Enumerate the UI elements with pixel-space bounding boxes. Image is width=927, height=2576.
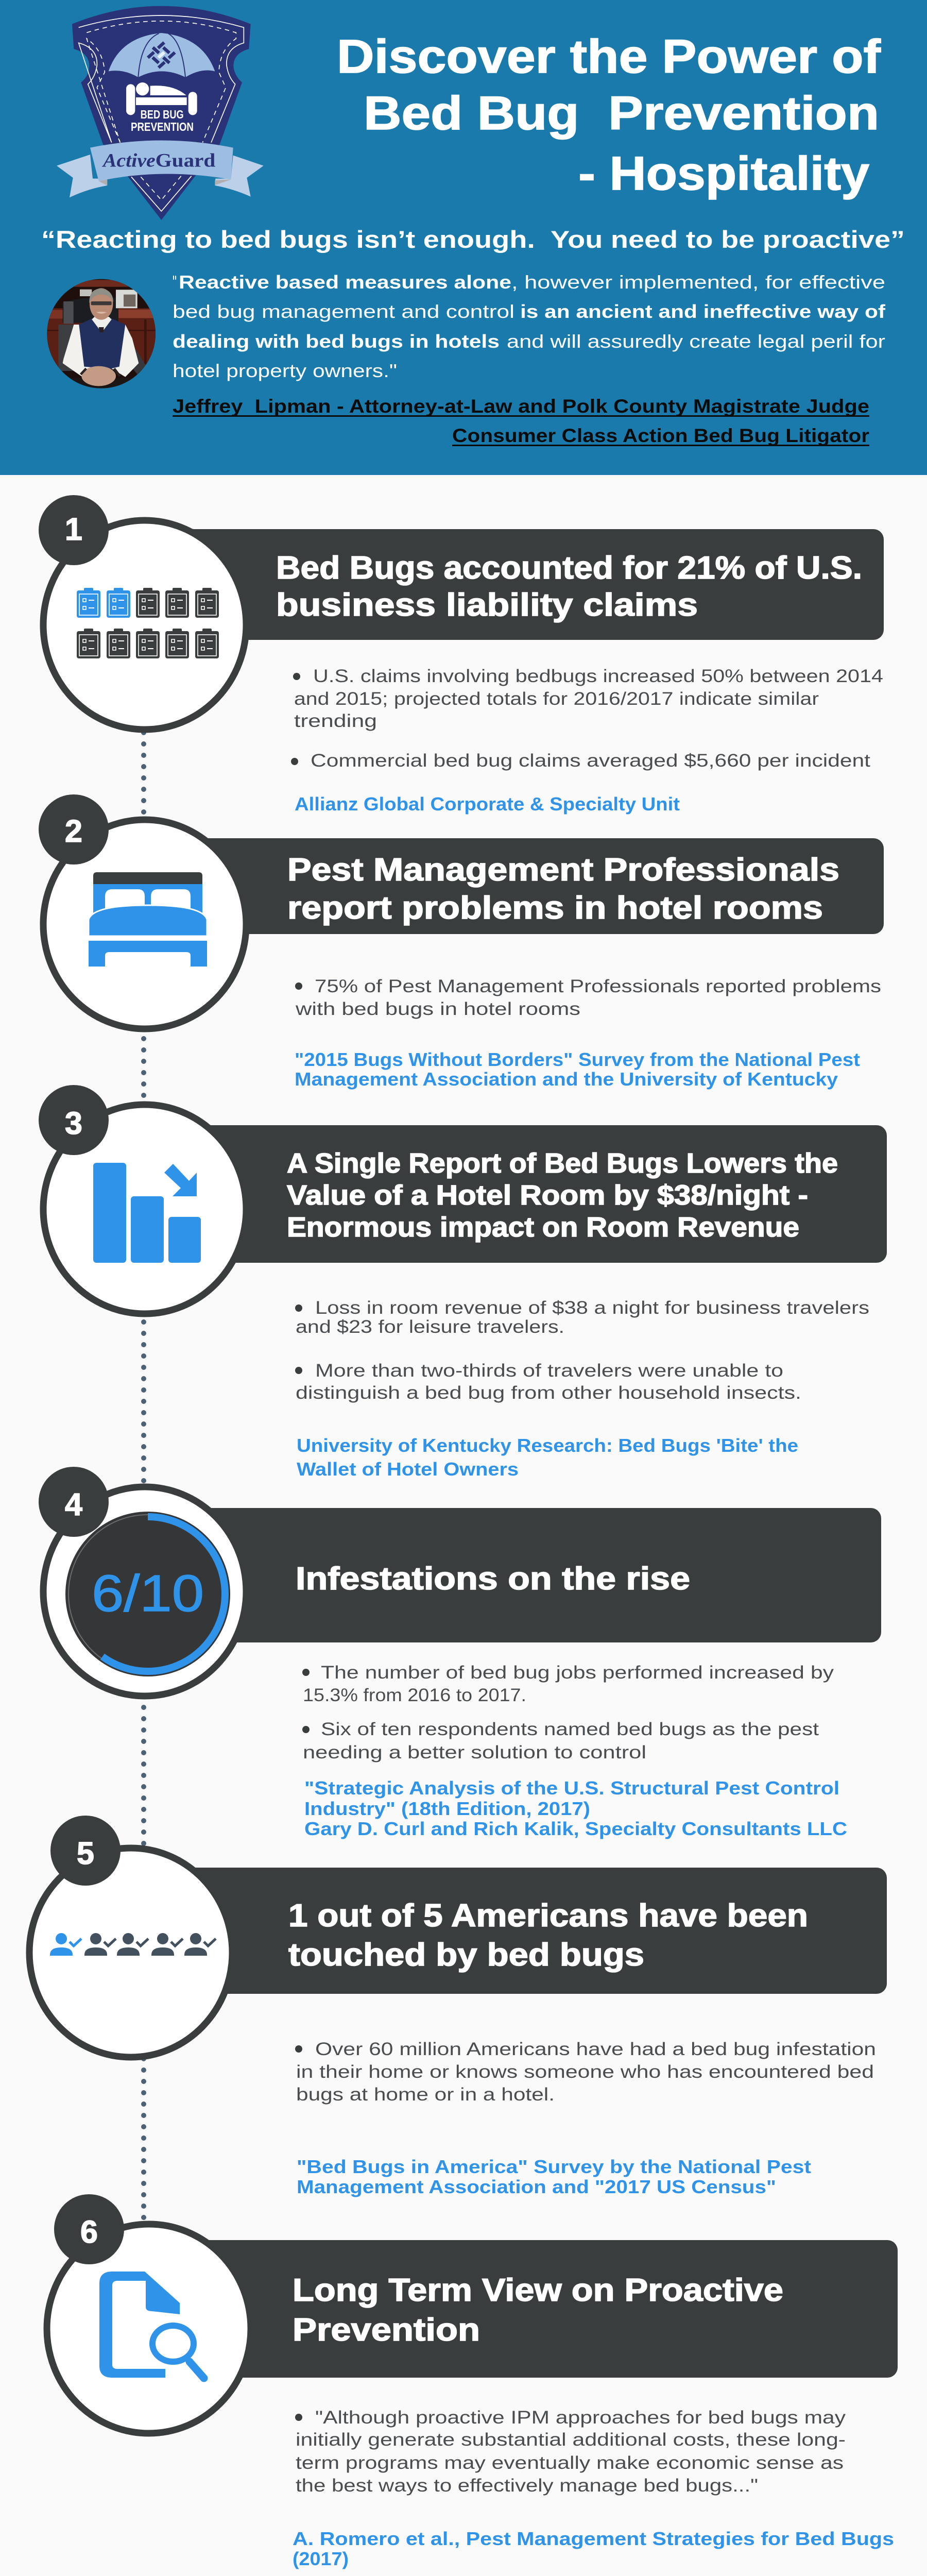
quote body: " — [173, 272, 177, 293]
bullets 1: trending — [294, 711, 377, 731]
attribution — [173, 396, 869, 446]
heading banner 2: Pest Management Professionals — [287, 852, 839, 888]
source 4: Gary D. Curl and Rich Kalik, Specialty Consultants LLC — [304, 1818, 847, 1839]
bullet 6: initially generate substantial additional costs, these long- — [296, 2430, 846, 2450]
heading banner 2: report problems in hotel rooms — [287, 890, 823, 926]
logo badge: ActiveGuard shield: PREVENTION — [131, 120, 194, 133]
photo: Jeffrey Lipman portrait — [45, 278, 158, 392]
bullets 4 — [302, 1663, 834, 1762]
source 5: "Bed Bugs in America" Survey by the National Pest — [297, 2156, 811, 2177]
heading banner 5 — [149, 1868, 887, 1994]
bullets 3: distinguish a bed bug from other household insects. — [296, 1383, 801, 1403]
pull quote: “Reacting to bed bugs isn’t enough. You need to be proactive” — [41, 226, 905, 253]
icon circle 2: bed — [43, 820, 246, 1029]
number badge 5: 5 — [77, 1836, 94, 1871]
heading banner 4: Infestations on the rise — [296, 1561, 690, 1597]
source 6 — [293, 2528, 894, 2569]
bullet 5: Over 60 million Americans have had a bed bug infestation — [315, 2039, 876, 2059]
quote body: and will assuredly create legal peril for — [507, 331, 885, 352]
heading banner 4 — [149, 1508, 881, 1642]
bullet 2 — [295, 976, 881, 1019]
icon circle 1: clipboards — [43, 520, 246, 730]
bullets 3 — [295, 1298, 869, 1403]
logo badge: ActiveGuard shield: Active — [102, 150, 156, 171]
bullet 6: the best ways to effectively manage bed bugs..." — [296, 2476, 758, 2496]
logo badge: ActiveGuard shield — [57, 6, 264, 220]
heading banner 3: Value of a Hotel Room by $38/night - — [287, 1180, 808, 1211]
heading banner 1: business liability claims — [276, 587, 698, 623]
source 6: (2017) — [293, 2548, 349, 2569]
title: Discover the Power of — [337, 30, 881, 83]
section 5: Americans touched — [29, 1816, 887, 2197]
number badge 1: 1 — [65, 512, 82, 547]
logo badge: ActiveGuard shield: BED BUG — [141, 108, 184, 121]
heading banner 3: A Single Report of Bed Bugs Lowers the — [287, 1148, 838, 1179]
heading banner 2 — [149, 838, 884, 934]
bullets 4: 15.3% from 2016 to 2017. — [303, 1685, 526, 1705]
source 4: Industry" (18th Edition, 2017) — [304, 1798, 590, 1819]
section 2: hotel rooms — [39, 794, 884, 1090]
quote body — [173, 272, 886, 381]
attribution: Jeffrey Lipman - Attorney-at-Law and Polk County Magistrate Judge — [173, 396, 869, 417]
bullet 6 — [295, 2408, 846, 2496]
number badge 4 — [39, 1467, 109, 1537]
heading banner 5: touched by bed bugs — [288, 1937, 644, 1973]
logo badge: ActiveGuard shield: Guard — [156, 150, 216, 171]
quote body: bed bug management and control — [173, 301, 514, 322]
heading banner 6: Prevention — [293, 2312, 480, 2348]
number badge 3: 3 — [65, 1106, 82, 1141]
source 4 — [304, 1777, 847, 1839]
title: - Hospitality — [578, 147, 869, 200]
section 1: liability claims — [39, 495, 884, 815]
bullets 1: Commercial bed bug claims averaged $5,660 per incident — [311, 751, 870, 771]
number badge 2: 2 — [65, 814, 82, 849]
dotted connector line — [141, 733, 146, 2231]
heading banner 3 — [149, 1125, 887, 1263]
bullet 6: term programs may eventually make economic sense as — [296, 2453, 844, 2473]
quote body: is an ancient and ineffective way of — [520, 301, 886, 322]
number badge 2 — [39, 794, 109, 865]
number badge 1 — [39, 495, 109, 565]
source 2: "2015 Bugs Without Borders" Survey from the National Pest — [295, 1049, 860, 1070]
bullet 2: with bed bugs in hotel rooms — [295, 999, 580, 1019]
source 3: Wallet of Hotel Owners — [297, 1459, 519, 1480]
bullets 3: and $23 for leisure travelers. — [296, 1317, 564, 1337]
bullets 3: More than two-thirds of travelers were unable to — [315, 1361, 783, 1381]
heading banner 6 — [154, 2240, 898, 2378]
heading banner 3: Enormous impact on Room Revenue — [287, 1212, 799, 1243]
number badge 6 — [54, 2194, 124, 2264]
header panel — [0, 0, 927, 475]
bullets 1 — [291, 666, 883, 771]
attribution: Consumer Class Action Bed Bug Litigator — [452, 425, 869, 446]
quote body: dealing with bed bugs in hotels — [173, 331, 500, 352]
heading banner 1 — [149, 529, 884, 640]
source 3: University of Kentucky Research: Bed Bugs 'Bite' the — [297, 1435, 798, 1456]
icon circle 4: 6/10 progress ring: 6/10 — [92, 1565, 204, 1622]
icon circle 4: 6/10 progress ring — [43, 1487, 246, 1696]
bullets 4: needing a better solution to control — [303, 1742, 646, 1762]
bullet 5 — [295, 2039, 876, 2105]
section 3: room value — [39, 1085, 887, 1480]
heading banner 1: Bed Bugs accounted for 21% of U.S. — [276, 550, 862, 586]
icon circle 3: falling bars — [43, 1105, 246, 1314]
source 1: Allianz Global Corporate & Specialty Unit — [295, 793, 680, 815]
icon circle 5: people — [29, 1848, 232, 2057]
bullet 2: 75% of Pest Management Professionals reported problems — [315, 976, 881, 996]
bullet 5: in their home or knows someone who has encountered bed — [296, 2062, 874, 2082]
source 2 — [295, 1049, 860, 1090]
source 3 — [297, 1435, 798, 1480]
quote body: hotel property owners." — [173, 360, 397, 381]
bullets 4: Six of ten respondents named bed bugs as the pest — [321, 1719, 819, 1739]
number badge 3 — [39, 1085, 109, 1155]
bullets 4: The number of bed bug jobs performed increased by — [321, 1663, 834, 1683]
quote body: Reactive based measures alone — [179, 272, 511, 293]
heading banner 5: 1 out of 5 Americans have been — [288, 1898, 808, 1934]
section 6: long term view — [47, 2194, 898, 2569]
bullet 5: bugs at home or in a hotel. — [296, 2084, 555, 2105]
number badge 4: 4 — [65, 1487, 82, 1522]
title: Bed Bug Prevention — [364, 87, 879, 140]
source 5: Management Association and "2017 US Census" — [297, 2176, 776, 2197]
source 4: "Strategic Analysis of the U.S. Structural Pest Control — [304, 1777, 839, 1799]
bullets 1: and 2015; projected totals for 2016/2017 indicate similar — [294, 689, 819, 709]
source 5 — [297, 2156, 811, 2197]
icon circle 6: document search — [47, 2224, 251, 2433]
source 6: A. Romero et al., Pest Management Strategies for Bed Bugs — [293, 2528, 894, 2549]
title — [337, 30, 881, 200]
heading banner 6: Long Term View on Proactive — [293, 2273, 783, 2308]
number badge 6: 6 — [80, 2214, 98, 2249]
number badge 5 — [50, 1816, 121, 1886]
quote body: , however implemented, for effective — [511, 272, 885, 293]
bullets 3: Loss in room revenue of $38 a night for business travelers — [315, 1298, 869, 1318]
section 4: infestations — [39, 1467, 881, 1839]
bullets 1: U.S. claims involving bedbugs increased 50% between 2014 — [313, 666, 883, 686]
bullet 6: "Although proactive IPM approaches for bed bugs may — [315, 2408, 846, 2428]
source 2: Management Association and the University of Kentucky — [295, 1069, 838, 1090]
